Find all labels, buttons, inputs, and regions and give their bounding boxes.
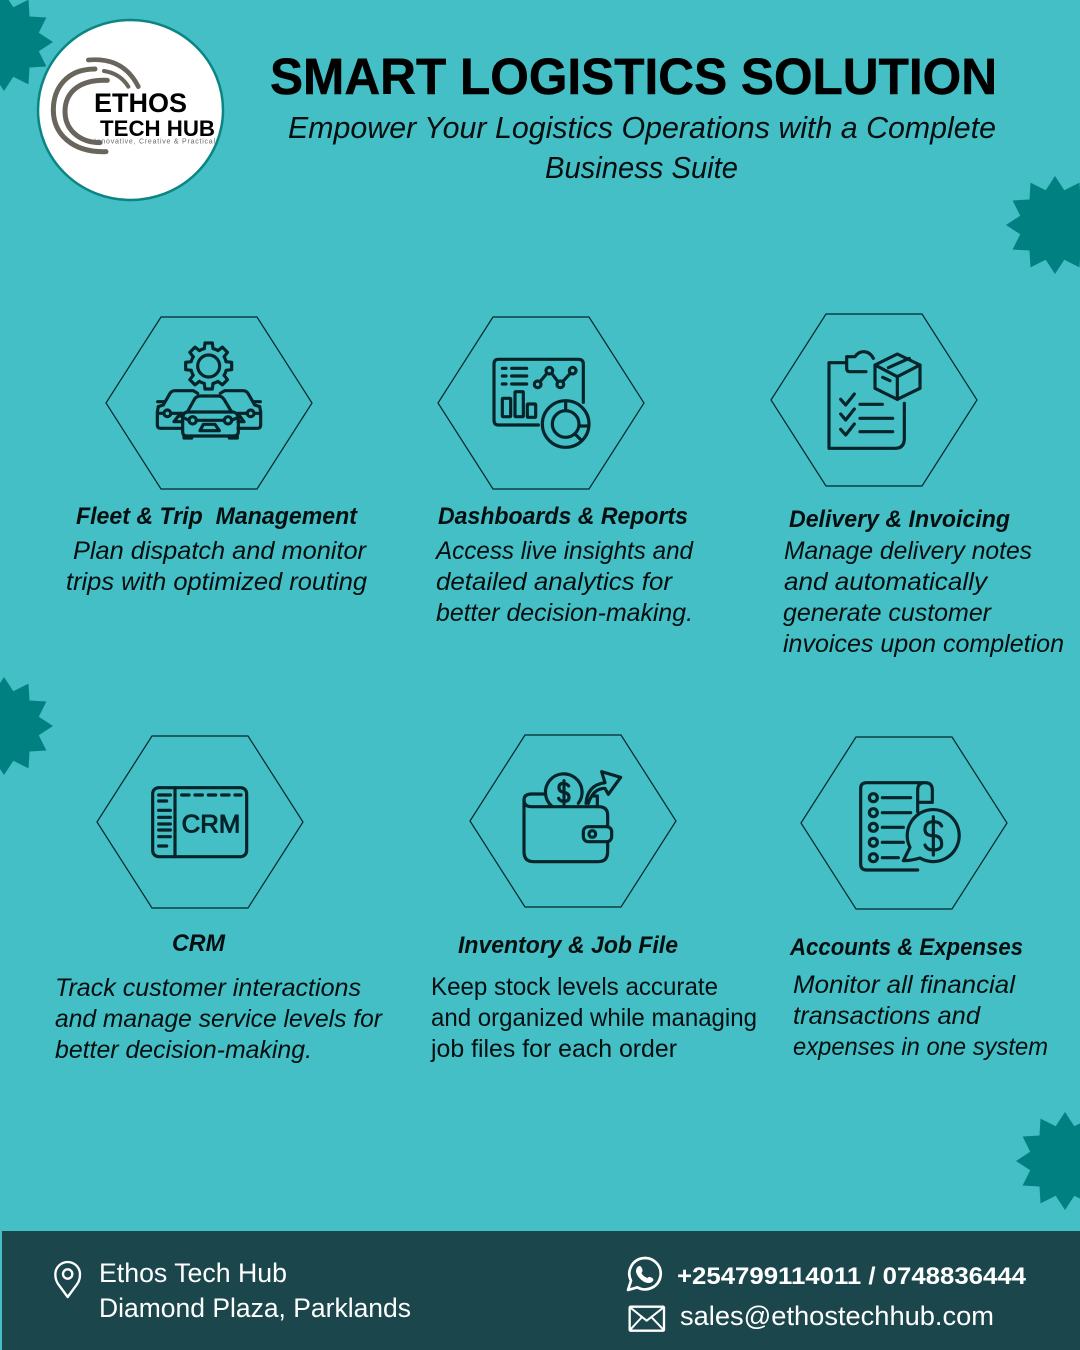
hexagon frame <box>106 317 312 489</box>
heading: CRM <box>172 930 226 957</box>
description: better decision-making. <box>436 599 693 627</box>
address <box>99 1258 411 1323</box>
icon: cars with gear <box>157 343 261 438</box>
description: Manage delivery notes <box>784 537 1032 565</box>
description <box>66 537 368 596</box>
panel: delivery and invoicing <box>771 314 1064 658</box>
description: transactions and <box>793 1002 981 1030</box>
heading: Inventory & Job File <box>458 932 678 959</box>
description: generate customer <box>783 599 993 627</box>
logo wordmark: TECH HUB <box>100 116 215 141</box>
panel: inventory and job file <box>430 735 757 1063</box>
description: Access live insights and <box>434 537 694 565</box>
heading: Fleet & Trip Management <box>76 503 358 530</box>
description <box>55 974 384 1064</box>
decorative star: upper right <box>1006 176 1080 274</box>
description: and organized while managing <box>431 1004 757 1032</box>
decorative star: middle left <box>0 677 53 775</box>
icon: whatsapp <box>628 1258 661 1290</box>
heading: Delivery & Invoicing <box>789 506 1010 533</box>
panel: fleet and trip management <box>66 317 368 596</box>
description: and automatically <box>784 568 989 596</box>
hexagon frame <box>771 314 977 486</box>
address: Diamond Plaza, Parklands <box>99 1293 411 1323</box>
icon: envelope <box>630 1307 664 1331</box>
phone numbers: +254799114011 / 0748836444 <box>677 1263 1027 1290</box>
subtitle: Empower Your Logistics Operations with a Complete <box>288 110 996 145</box>
description: job files for each order <box>430 1035 677 1063</box>
description <box>434 537 694 627</box>
description: Keep stock levels accurate <box>431 973 718 1001</box>
description: Plan dispatch and monitor <box>73 537 368 565</box>
decorative star: lower right <box>1016 1112 1080 1210</box>
icon: CRM window: CRM <box>182 810 240 838</box>
description: Track customer interactions <box>55 974 361 1002</box>
icon: ledger with dollar bubble <box>861 783 959 870</box>
description: expenses in one system <box>793 1033 1048 1061</box>
logo wordmark: ETHOS <box>94 88 187 118</box>
heading: Accounts & Expenses <box>789 934 1023 961</box>
panel: accounts and expenses <box>789 737 1048 1061</box>
panel: CRM <box>55 736 384 1064</box>
icon: CRM window <box>153 788 247 857</box>
footer contact bar <box>2 1231 1080 1350</box>
decorative star: top left <box>0 0 53 91</box>
description: Monitor all financial <box>793 971 1016 999</box>
email: sales@ethostechhub.com <box>680 1301 994 1331</box>
panel: dashboards and reports <box>434 317 694 627</box>
description: detailed analytics for <box>436 568 674 596</box>
logo: Ethos Tech Hub <box>38 20 223 200</box>
description <box>430 973 757 1063</box>
description: trips with optimized routing <box>66 568 367 596</box>
description <box>783 537 1064 658</box>
logo wordmark: Innovative, Creative & Practical <box>94 138 215 146</box>
hexagon frame <box>470 735 676 907</box>
heading: Dashboards & Reports <box>438 503 688 530</box>
description: invoices upon completion <box>783 630 1064 658</box>
description: better decision-making. <box>55 1036 312 1064</box>
icon: checklist with box <box>829 352 920 448</box>
subtitle: Business Suite <box>545 150 738 185</box>
address: Ethos Tech Hub <box>99 1258 287 1288</box>
logo arcs <box>53 60 138 152</box>
title: SMART LOGISTICS SOLUTION <box>270 48 997 105</box>
description <box>793 971 1048 1061</box>
icon: dashboard with charts <box>494 359 589 447</box>
description: and manage service levels for <box>55 1005 384 1033</box>
icon: wallet with coin and arrow <box>524 772 621 862</box>
hexagon frame <box>97 736 303 908</box>
logo wordmark <box>94 88 215 146</box>
subtitle <box>288 110 996 185</box>
hexagon frame <box>801 737 1007 909</box>
icon: location pin <box>55 1262 80 1297</box>
hexagon frame <box>438 317 644 489</box>
